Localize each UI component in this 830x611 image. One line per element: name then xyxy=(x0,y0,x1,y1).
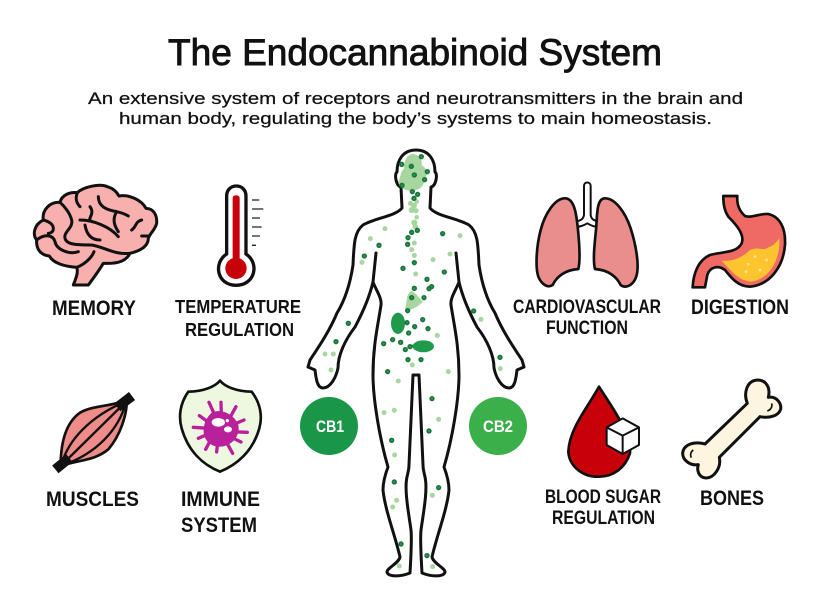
label: immune system: SYSTEM xyxy=(181,514,257,537)
label: muscles: MUSCLES xyxy=(46,488,139,511)
label: immune system xyxy=(181,488,260,537)
dark receptor dots (CB1) xyxy=(334,155,502,557)
label: blood sugar regulation: BLOOD SUGAR xyxy=(545,487,661,508)
icon: shield with virus xyxy=(180,381,261,472)
badge: CB1 xyxy=(300,397,358,455)
label: blood sugar regulation xyxy=(545,487,661,529)
subtitle: An extensive system of receptors and neurotransmitters in the brain and xyxy=(88,89,743,108)
label: temperature regulation xyxy=(175,297,301,340)
title: The Endocannabinoid System xyxy=(168,32,662,73)
human body figure xyxy=(308,150,524,576)
icon: brain xyxy=(34,185,157,285)
label: immune system: IMMUNE xyxy=(181,488,260,511)
icon: muscle xyxy=(55,396,132,469)
label: digestion: DIGESTION xyxy=(691,296,789,319)
icon: lungs xyxy=(537,182,638,287)
dark green organs xyxy=(391,313,434,352)
light green receptor clusters xyxy=(398,154,427,311)
icon: thermometer xyxy=(219,186,263,285)
body outline xyxy=(308,150,524,576)
label: blood sugar regulation: REGULATION xyxy=(552,508,655,529)
label: memory: MEMORY xyxy=(52,297,136,320)
label: bones: BONES xyxy=(700,487,764,510)
badge: CB1: CB1 xyxy=(316,417,344,436)
badge: CB2 xyxy=(469,397,527,455)
badge: CB2: CB2 xyxy=(483,417,513,436)
icon: stomach xyxy=(693,196,785,287)
label: cardiovascular function xyxy=(513,297,661,339)
subtitle xyxy=(88,89,743,128)
subtitle: human body, regulating the body’s systems to main homeostasis. xyxy=(119,109,712,128)
icon: blood drop with sugar cube xyxy=(568,387,639,477)
light receptor dots (CB2) xyxy=(322,226,503,569)
label: cardiovascular function: CARDIOVASCULAR xyxy=(513,297,661,318)
label: cardiovascular function: FUNCTION xyxy=(546,318,628,339)
label: temperature regulation: REGULATION xyxy=(185,320,294,340)
icon: bone xyxy=(683,380,781,478)
label: temperature regulation: TEMPERATURE xyxy=(175,297,301,317)
